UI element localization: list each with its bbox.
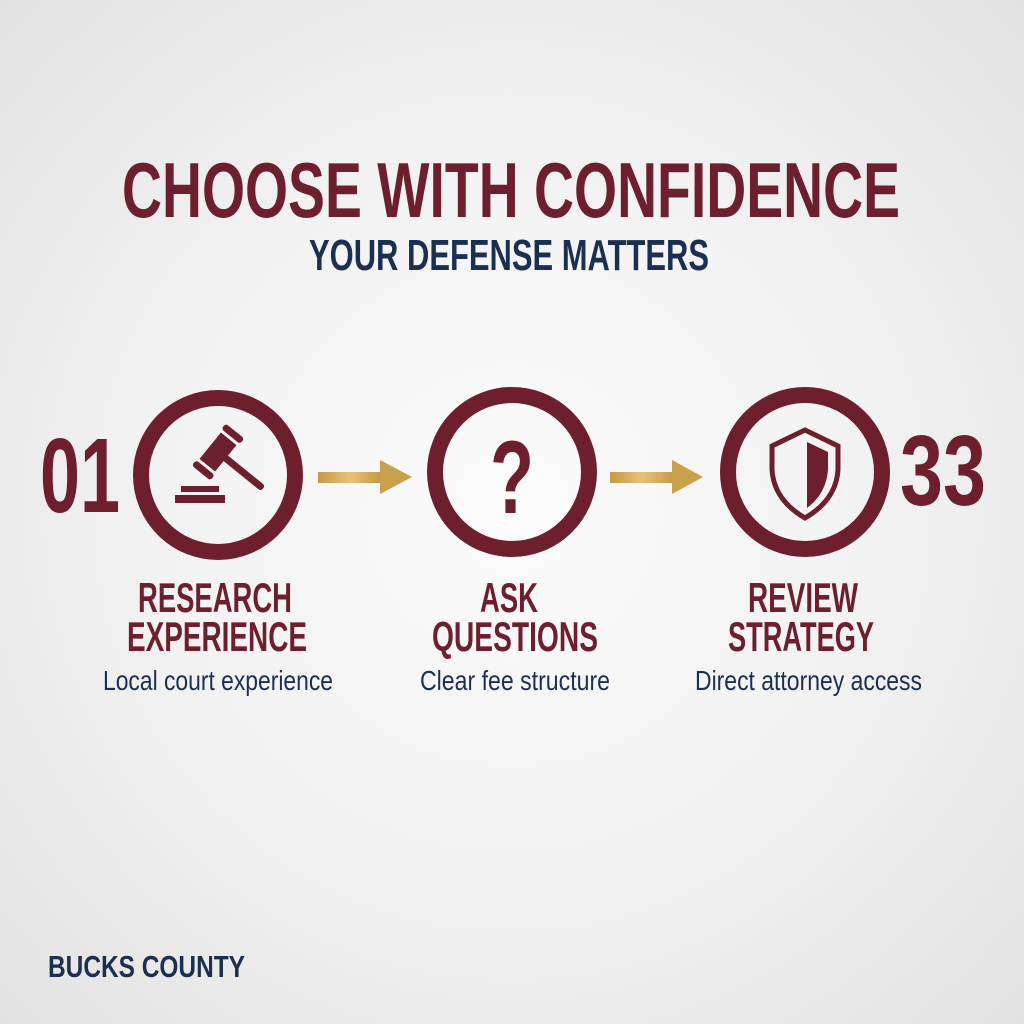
step 2 label: QUESTIONS [432,613,598,660]
step 3 label: STRATEGY [728,613,874,660]
step 3 label [695,574,922,696]
step 1 label [103,574,333,696]
step 1 label: EXPERIENCE [127,613,307,660]
footer: bucks county: BUCKS COUNTY [48,949,245,984]
step 3 label: Direct attorney access [695,665,922,696]
step 2 label: Clear fee structure [420,665,610,696]
step 3: shield icon circle [728,395,882,549]
arrow 2 [610,460,703,494]
step 3 label: REVIEW [748,574,858,621]
step 2: question icon circle: ? [490,420,534,536]
step 1 label: Local court experience [103,665,333,696]
arrow 1 [318,460,412,494]
step 1: gavel icon circle [141,398,295,552]
step 2: question icon circle [435,395,589,549]
subtitle: YOUR DEFENSE MATTERS [309,231,709,280]
number 33: 33 [900,415,986,527]
step 1 label: RESEARCH [138,574,292,621]
number 01: 01 [40,417,120,535]
step 2 label: ASK [480,574,538,621]
step 2 label [420,574,610,696]
